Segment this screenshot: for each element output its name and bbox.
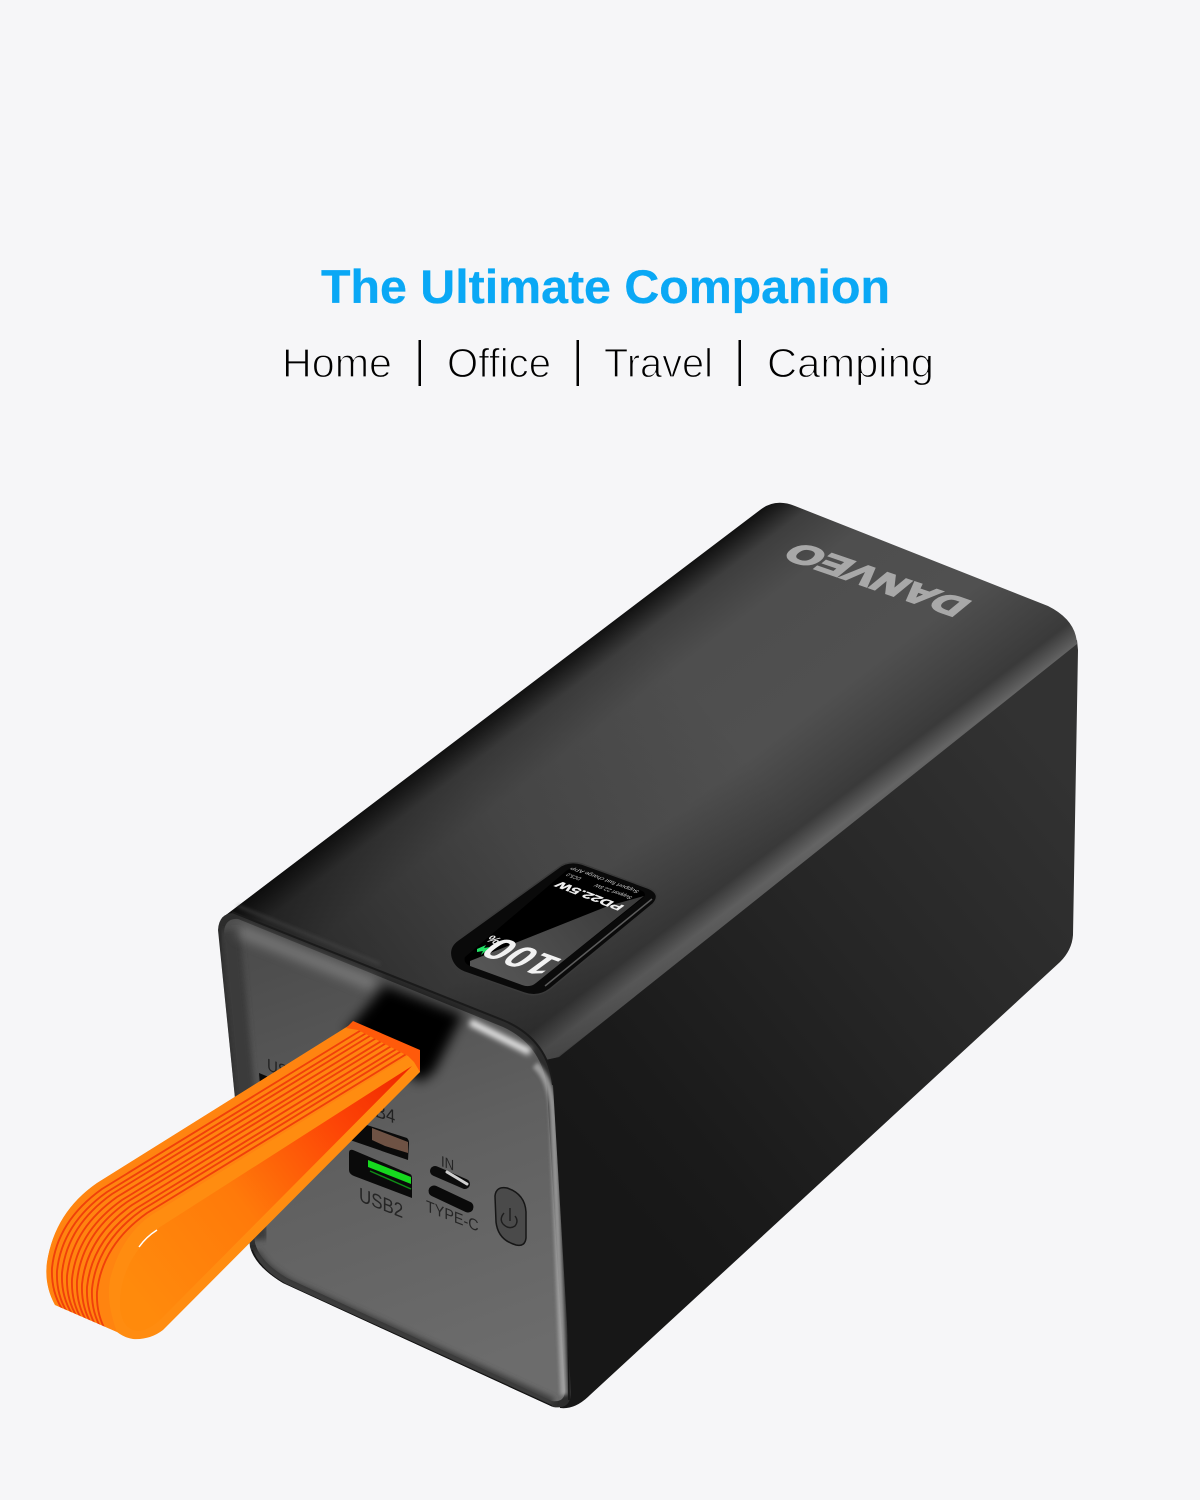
shadow of strap anchor: [345, 985, 463, 1082]
display bezel: [450, 863, 657, 995]
subtitle: use cases: Home: [282, 340, 392, 386]
display small print: Support fast charge APP: [570, 865, 642, 893]
strap inner highlight: [139, 1230, 157, 1247]
port label USB4: USB4: [352, 1092, 395, 1129]
power button: [495, 1188, 526, 1245]
LCD display: [450, 863, 657, 995]
left edge band: [230, 930, 258, 1240]
icon: green charging bolt: [477, 945, 490, 955]
infographic canvas: [46, 268, 1078, 1408]
port USB1: [259, 1073, 320, 1122]
brand logo: DANVEO: [775, 537, 979, 622]
subtitle: use cases: Travel: [604, 340, 713, 386]
top edge highlight: [238, 930, 375, 985]
battery percent digits: 100: [471, 932, 571, 982]
strap ribbed band: [46, 1023, 420, 1333]
front panel rim: [218, 913, 571, 1407]
strap inner surface: [120, 1066, 412, 1331]
orange carrying strap: [46, 1021, 420, 1339]
port label IN: IN: [441, 1153, 454, 1175]
percent sign: %: [482, 933, 505, 946]
display bezel highlight: [545, 899, 652, 986]
port label USB3: USB3: [272, 1148, 315, 1183]
display glass: [465, 868, 645, 986]
top panel of power bank with ridge highlight: [222, 503, 1077, 1060]
subtitle: use cases: Camping: [767, 340, 934, 386]
right edge highlight: [535, 1065, 564, 1395]
port USB-C output: [434, 1191, 468, 1207]
front panel: [218, 906, 571, 1407]
power bank product: [218, 503, 1078, 1408]
bottom edge band: [255, 1252, 553, 1403]
front panel face: [224, 919, 565, 1401]
port label USB2: USB2: [359, 1184, 403, 1223]
title: The Ultimate Companion: [321, 260, 890, 313]
icon: power symbol: [501, 1208, 517, 1228]
subtitle: use cases: Office: [447, 340, 551, 386]
port label TYPE-C: TYPE-C: [426, 1197, 479, 1236]
port USB-C input: [435, 1171, 467, 1184]
display small print: DC5.0: [565, 872, 584, 880]
display small print: Support 22.5W: [593, 882, 635, 899]
PD rating: PD22.5W: [552, 879, 627, 912]
port USB4: [345, 1118, 409, 1160]
display glass reflection: [470, 896, 644, 986]
side panel of power bank: [540, 640, 1078, 1408]
port USB2 with green tongue: [349, 1150, 412, 1198]
display small print: [565, 865, 642, 899]
subtitle: use cases: [282, 340, 934, 386]
strap end cap: [346, 1021, 420, 1072]
strap outer band: [46, 1023, 420, 1339]
port label USB1: USB1: [267, 1055, 306, 1088]
